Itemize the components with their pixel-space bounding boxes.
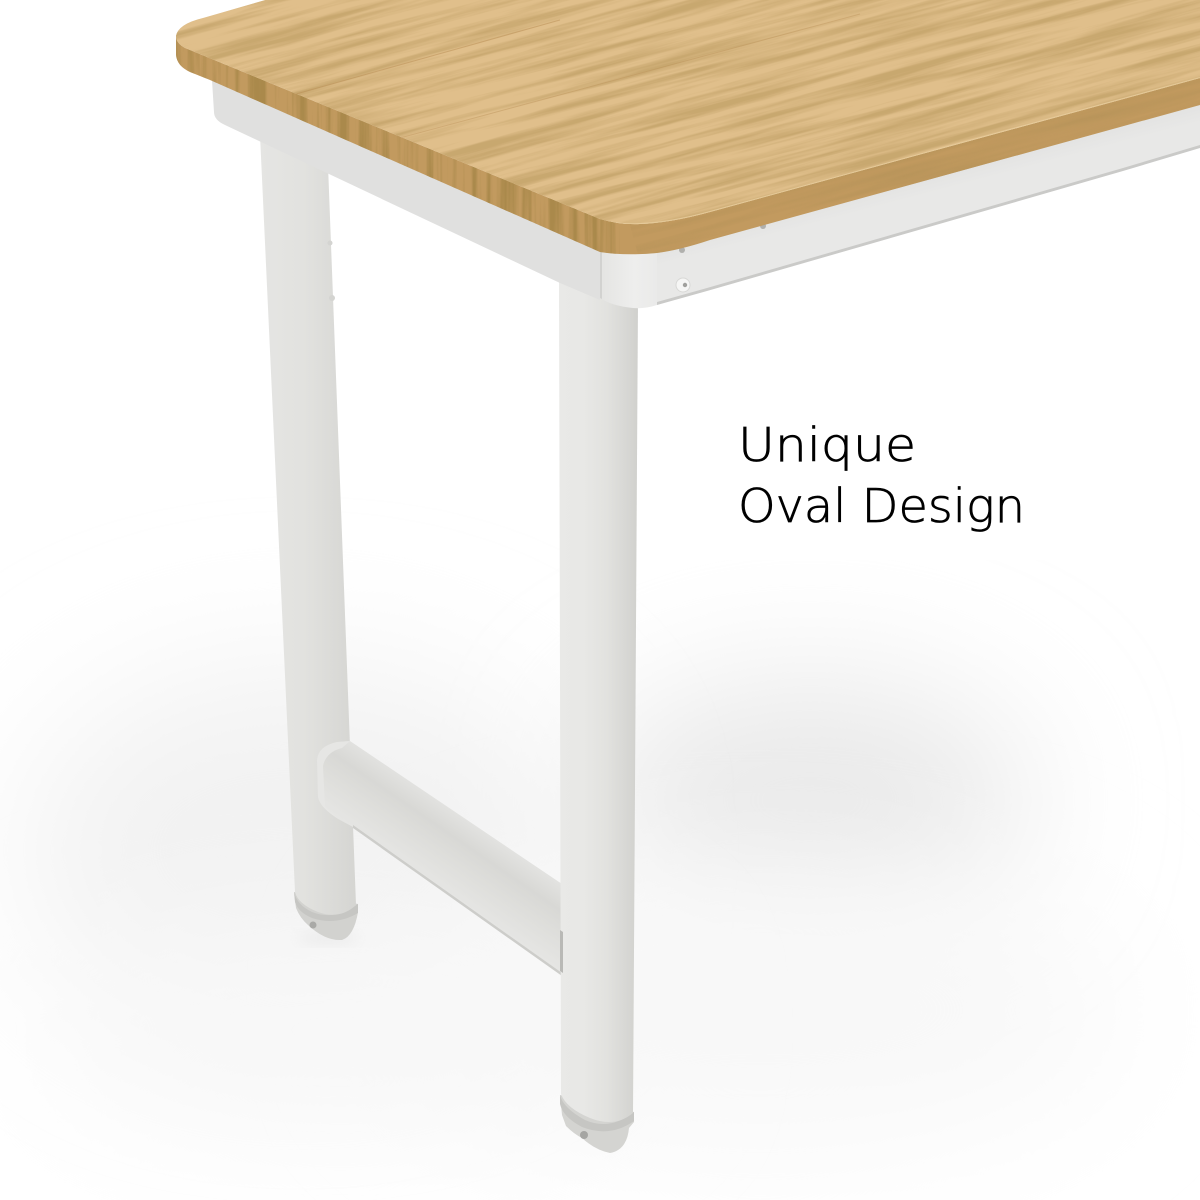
front leg <box>559 275 638 1153</box>
caption: Unique <box>738 418 916 472</box>
caption <box>738 418 1025 533</box>
apron right side <box>650 102 1200 306</box>
table apron <box>212 80 1200 308</box>
crossbar <box>317 741 562 976</box>
apron left side <box>212 80 600 300</box>
front leg foot <box>560 1095 634 1153</box>
wood surface <box>176 0 1200 224</box>
table top <box>176 0 1200 254</box>
caption: Oval Design <box>738 479 1025 533</box>
apron corner <box>600 250 657 308</box>
wood edge <box>176 38 1200 254</box>
back leg foot <box>294 892 358 940</box>
apron bolt <box>676 278 690 292</box>
back leg <box>260 135 358 943</box>
